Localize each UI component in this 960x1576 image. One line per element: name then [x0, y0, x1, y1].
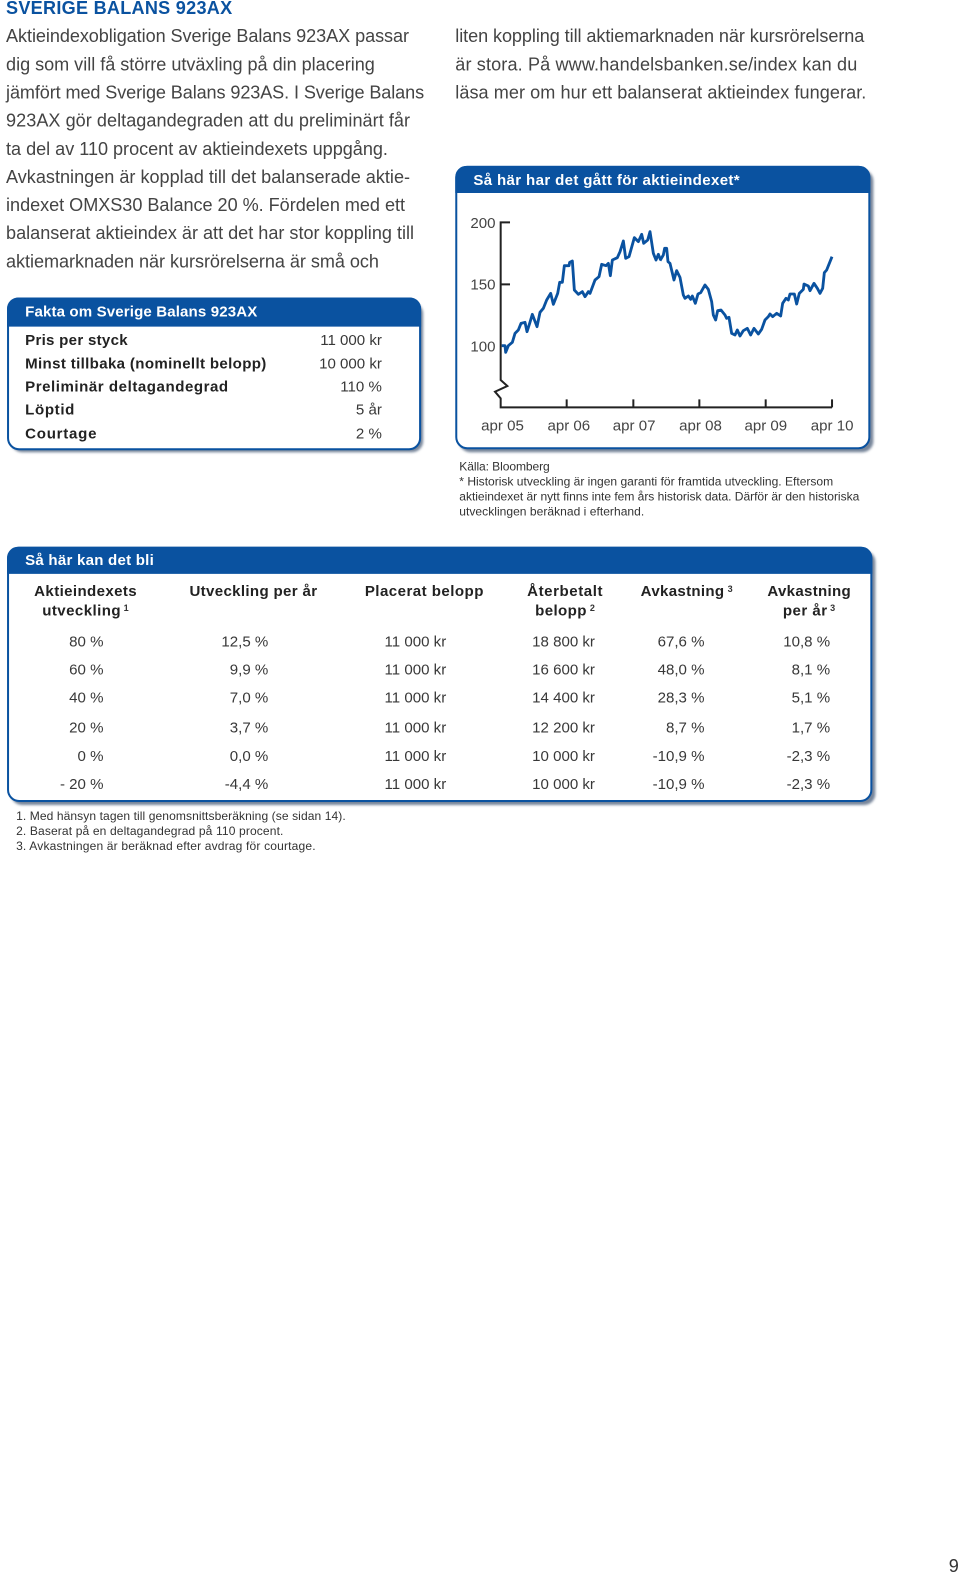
- table column headers: Aktieindexets: [34, 583, 137, 600]
- chart axes: [495, 222, 832, 407]
- text block: intro left column: [5, 26, 424, 271]
- text block: intro left column: Aktieindexobligation Sverige Balans 923AX passar: [6, 26, 409, 46]
- table rows: 11 000 kr: [385, 748, 446, 765]
- text block: intro left column: dig som vill få större utväxling på din placering: [6, 54, 375, 74]
- table rows: 11 000 kr: [385, 720, 446, 737]
- text block: chart source note: * Historisk utveckling är ingen garanti för framtida utveckling. Eftersom: [459, 474, 833, 488]
- table column headers: Återbetalt: [527, 583, 602, 600]
- table rows: 11 000 kr: [385, 634, 446, 651]
- fakta rows: Courtage: [25, 426, 96, 443]
- table rows: 8,1 %: [792, 661, 830, 678]
- text block: table footnotes: 2. Baserat på en deltagandegrad på 110 procent.: [16, 824, 283, 838]
- x-axis labels: apr 09: [744, 418, 787, 435]
- fakta heading: Fakta om Sverige Balans 923AX: [25, 304, 257, 321]
- table column headers: 1: [124, 603, 129, 613]
- y-axis labels: 150: [470, 276, 495, 293]
- text block: chart source note: aktieindexet är nytt finns inte fem års historisk data. Därför är den historiska: [459, 489, 860, 503]
- table column headers: per år: [783, 603, 827, 620]
- text block: chart source note: Källa: Bloomberg: [459, 459, 550, 473]
- table heading: Så här kan det bli: [25, 552, 154, 569]
- table column headers: Placerat belopp: [365, 583, 483, 600]
- fakta rows: 110 %: [340, 378, 382, 395]
- y-axis labels: 100: [470, 339, 495, 356]
- text block: intro right column: är stora. På www.handelsbanken.se/index kan du: [455, 54, 857, 74]
- table rows: 11 000 kr: [385, 689, 446, 706]
- table rows: 3,7 %: [230, 720, 268, 737]
- text block: chart source note: [459, 459, 860, 519]
- fakta rows: Löptid: [25, 402, 74, 419]
- table rows: 40 %: [69, 689, 104, 706]
- table rows: 9,9 %: [230, 661, 268, 678]
- text block: intro left column: Avkastningen är kopplad till det balanserade aktie-: [6, 167, 410, 187]
- table column headers: 3: [830, 603, 835, 613]
- fakta rows: [25, 332, 382, 443]
- table rows: 60 %: [69, 661, 104, 678]
- table rows: 14 400 kr: [532, 689, 595, 706]
- table rows: 10 000 kr: [532, 776, 595, 793]
- table rows: 67,6 %: [658, 634, 705, 651]
- fakta rows: 2 %: [356, 426, 382, 443]
- fakta rows: Pris per styck: [25, 332, 128, 349]
- text block: chart source note: utvecklingen beräknad i efterhand.: [459, 505, 644, 519]
- x-axis labels: apr 07: [613, 418, 656, 435]
- table rows: -2,3 %: [787, 748, 830, 765]
- table rows: -10,9 %: [653, 776, 705, 793]
- text block: intro right column: läsa mer om hur ett balanserat aktieindex fungerar.: [455, 82, 866, 102]
- table rows: 7,0 %: [230, 689, 268, 706]
- panel: scenario table: [7, 547, 875, 805]
- table rows: 5,1 %: [792, 689, 830, 706]
- table rows: 18 800 kr: [532, 634, 595, 651]
- table rows: 0,0 %: [230, 748, 268, 765]
- text block: intro left column: aktiemarknaden när kursrörelserna är små och: [6, 251, 379, 271]
- table rows: -10,9 %: [653, 748, 705, 765]
- text block: table footnotes: [16, 809, 346, 853]
- x-axis labels: apr 06: [547, 418, 590, 435]
- fakta rows: Minst tillbaka (nominellt belopp): [25, 355, 266, 372]
- text block: table footnotes: 3. Avkastningen är beräknad efter avdrag för courtage.: [16, 839, 316, 853]
- table rows: 16 600 kr: [532, 661, 595, 678]
- fakta rows: 5 år: [356, 402, 382, 419]
- table column headers: Utveckling per år: [189, 583, 317, 600]
- fakta rows: 11 000 kr: [320, 332, 382, 349]
- text block: intro left column: ta del av 110 procent av aktieindexets uppgång.: [6, 139, 388, 159]
- text block: intro left column: indexet OMXS30 Balance 20 %. Fördelen med ett: [6, 195, 405, 215]
- panel: index chart: [455, 166, 873, 452]
- table rows: 11 000 kr: [385, 661, 446, 678]
- table rows: 80 %: [69, 634, 104, 651]
- index line: [502, 232, 832, 352]
- table rows: 10 000 kr: [532, 748, 595, 765]
- table column headers: 2: [590, 603, 595, 613]
- table rows: -2,3 %: [787, 776, 830, 793]
- x-axis labels: apr 05: [481, 418, 524, 435]
- table rows: 10,8 %: [783, 634, 830, 651]
- panel: fakta: [7, 297, 423, 452]
- table column headers: 3: [728, 584, 733, 594]
- fakta rows: Preliminär deltagandegrad: [25, 378, 228, 395]
- x-axis labels: [481, 418, 854, 435]
- text block: intro left column: balanserat aktieindex är att det har stor koppling till: [6, 223, 414, 243]
- y-axis labels: 200: [470, 215, 495, 232]
- text block: intro right column: liten koppling till aktiemarknaden när kursrörelserna: [455, 26, 865, 46]
- page number: 9: [949, 1556, 959, 1576]
- table rows: -4,4 %: [225, 776, 268, 793]
- table rows: 12 200 kr: [532, 720, 595, 737]
- chart heading: Så här har det gått för aktieindexet*: [473, 172, 740, 189]
- table column headers: Avkastning: [641, 583, 724, 600]
- text block: intro left column: 923AX gör deltagandegraden att du preliminärt får: [6, 111, 410, 131]
- text block: intro left column: jämfört med Sverige Balans 923AS. I Sverige Balans: [5, 82, 424, 102]
- table rows: 1,7 %: [792, 720, 830, 737]
- text block: intro right column: [455, 26, 866, 102]
- table column headers: [34, 583, 851, 620]
- x-axis labels: apr 10: [811, 418, 854, 435]
- table rows: - 20 %: [60, 776, 104, 793]
- y-axis labels: [470, 215, 495, 356]
- table column headers: utveckling: [42, 603, 121, 620]
- table rows: 48,0 %: [658, 661, 705, 678]
- table rows: 8,7 %: [666, 720, 705, 737]
- table column headers: Avkastning: [767, 583, 851, 600]
- fakta rows: 10 000 kr: [319, 355, 382, 372]
- text block: table footnotes: 1. Med hänsyn tagen till genomsnittsberäkning (se sidan 14).: [16, 809, 346, 823]
- table rows: 28,3 %: [658, 689, 705, 706]
- table rows: 0 %: [78, 748, 104, 765]
- table rows: [60, 634, 830, 793]
- table rows: 11 000 kr: [385, 776, 446, 793]
- table rows: 20 %: [69, 720, 104, 737]
- table column headers: belopp: [535, 603, 586, 620]
- x-axis labels: apr 08: [679, 418, 722, 435]
- table rows: 12,5 %: [221, 634, 268, 651]
